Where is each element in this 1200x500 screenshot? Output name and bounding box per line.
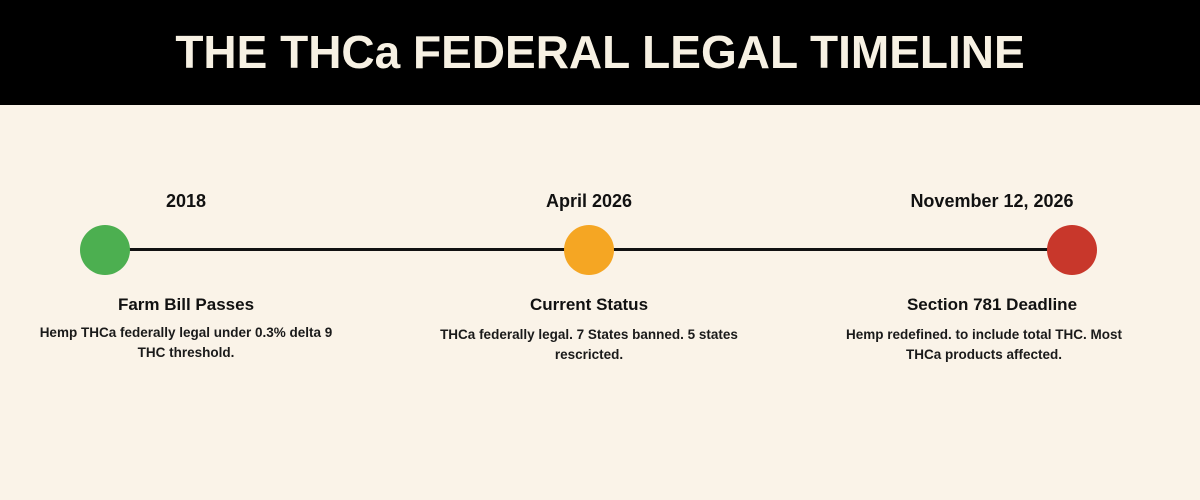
icon: orange circle	[564, 225, 614, 275]
heading: Section 781 Deadline: Section 781 Deadline	[907, 295, 1077, 314]
icon: red circle	[1047, 225, 1097, 275]
heading: Farm Bill Passes: Farm Bill Passes	[118, 295, 254, 314]
text: deadline description: Hemp redefined. to include total THC. Most THCa products affected.	[846, 327, 1122, 362]
icon: green circle	[80, 225, 130, 275]
year November 12, 2026: November 12, 2026	[910, 191, 1074, 211]
heading: Current Status: Current Status	[530, 295, 648, 314]
title bar	[0, 0, 1200, 105]
title bar: THE THCa FEDERAL LEGAL TIMELINE	[175, 26, 1025, 78]
year April 2026: April 2026	[546, 191, 632, 211]
year 2018: 2018	[166, 191, 206, 211]
timeline line	[105, 248, 1072, 251]
text: current description: THCa federally legal. 7 States banned. 5 states rescricted.	[440, 327, 738, 362]
text: 2018 description: Hemp THCa federally legal under 0.3% delta 9 THC threshold.	[40, 325, 332, 360]
